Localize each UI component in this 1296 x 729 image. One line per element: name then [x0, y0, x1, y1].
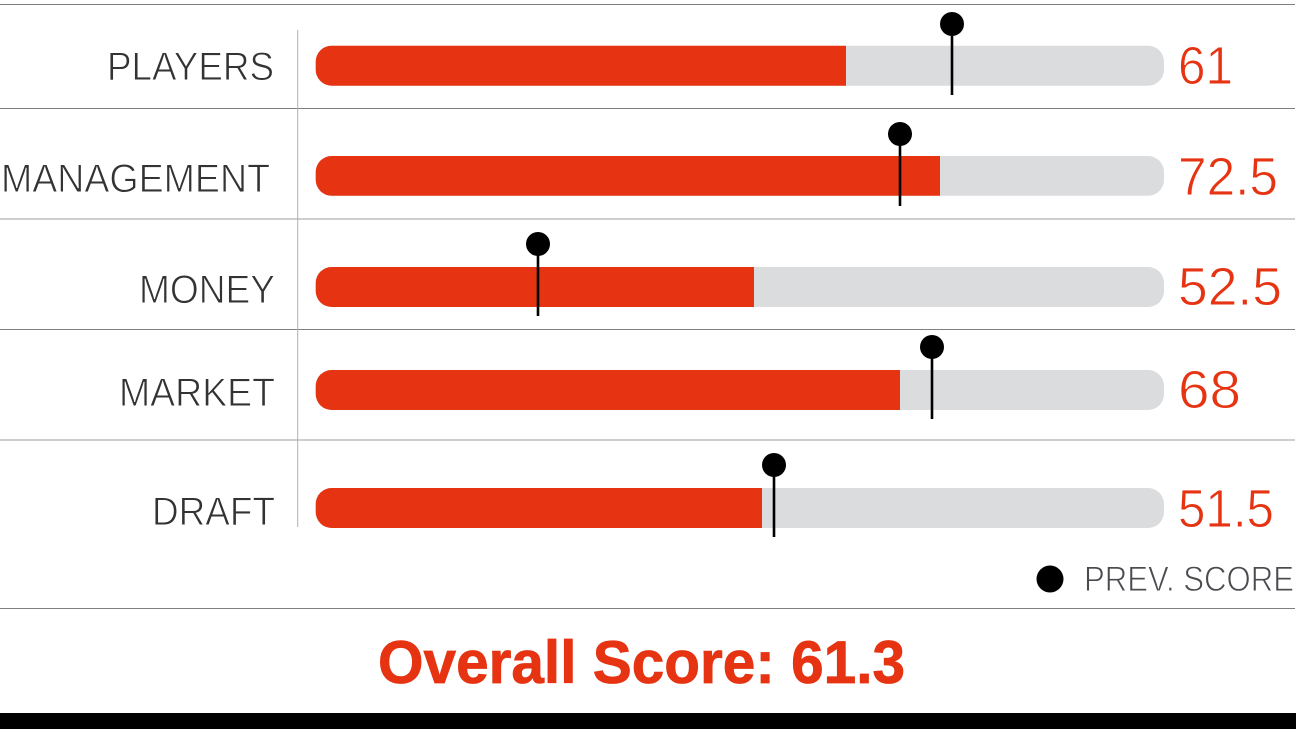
overall score: Overall Score: 61.3	[378, 629, 905, 696]
row: players: PLAYERS	[107, 45, 274, 89]
row: market: MARKET	[119, 371, 275, 415]
row: management: 72.5	[1178, 147, 1278, 207]
row: management: MANAGEMENT	[1, 157, 270, 201]
row: money: MONEY	[139, 268, 275, 312]
row: money	[139, 232, 1282, 317]
row: market	[119, 335, 1241, 420]
row: market: 68	[1178, 360, 1241, 420]
row: draft: 51.5	[1178, 479, 1274, 539]
row: players	[107, 12, 1233, 96]
row: draft	[152, 453, 1274, 539]
row: management	[1, 122, 1278, 207]
row: players: 61	[1178, 36, 1233, 96]
row: money: 52.5	[1178, 257, 1282, 317]
row: draft: DRAFT	[152, 490, 275, 534]
bottom black band	[0, 713, 1296, 729]
